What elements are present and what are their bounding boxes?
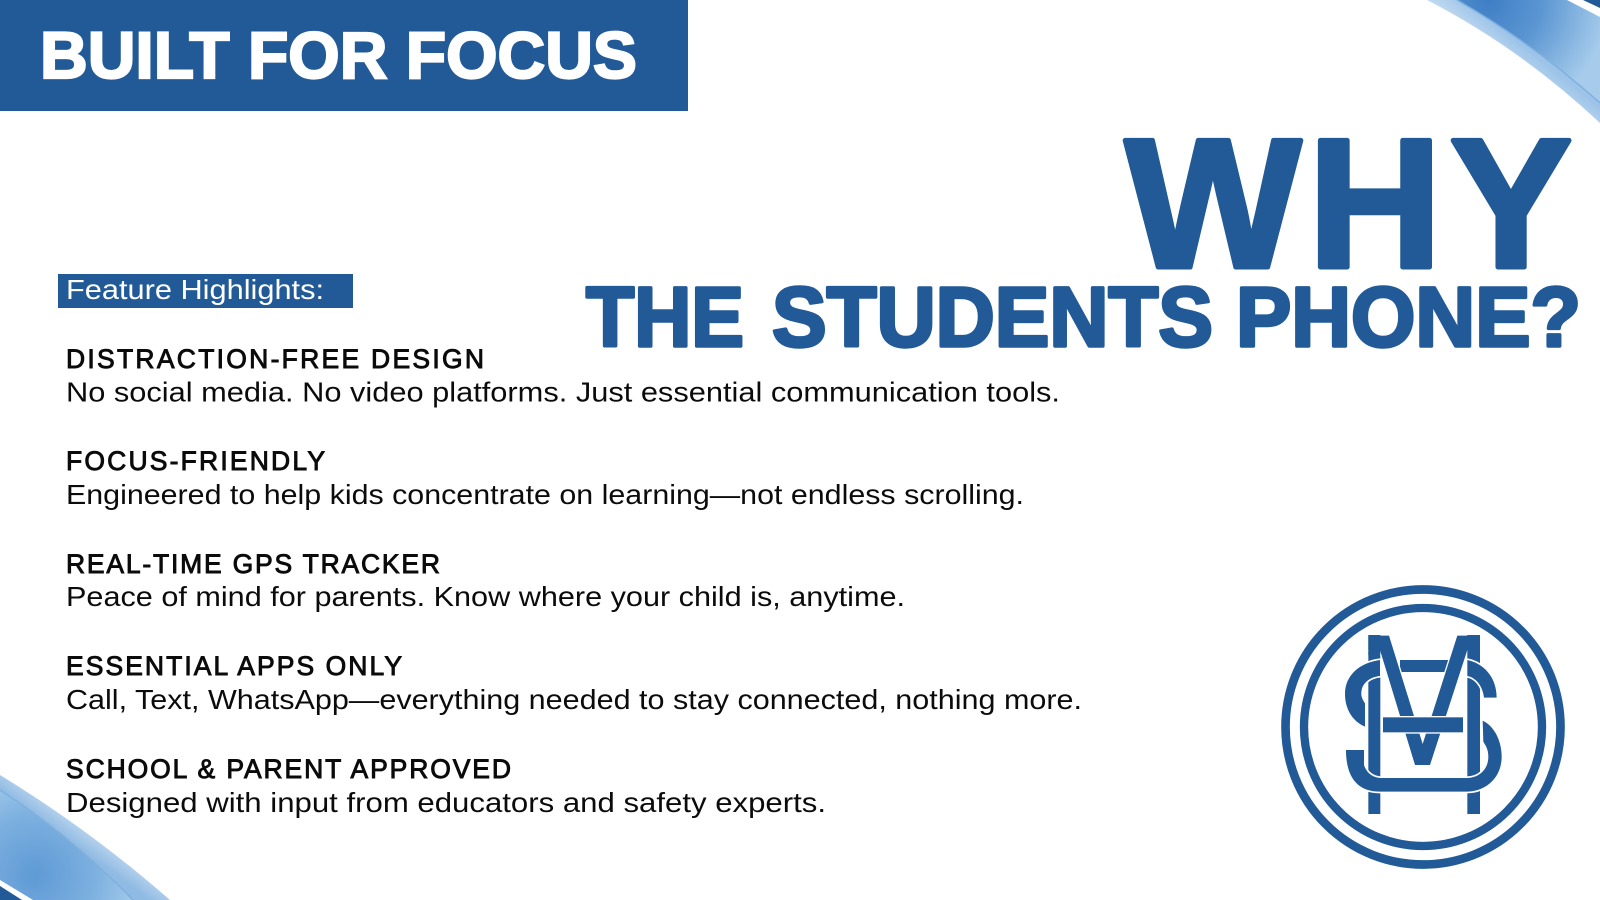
title banner: Built for Focus bbox=[0, 0, 688, 111]
feature: essential apps only: ESSENTIAL APPS ONLY bbox=[66, 651, 402, 681]
logo: MS monogram in double ring bbox=[1285, 589, 1560, 864]
heading: The Students Phone?: THE bbox=[586, 270, 744, 364]
feature: school and parent approved: Designed with input from educators and safety experts. bbox=[66, 787, 826, 818]
feature: distraction-free design bbox=[66, 344, 1060, 408]
heading: WHY: Y bbox=[1450, 100, 1572, 306]
decorative swoosh: bottom left corner bbox=[0, 775, 170, 900]
title banner: Built for Focus: BUILT FOR FOCUS bbox=[40, 18, 637, 92]
feature: real-time GPS tracker: REAL-TIME GPS TRACKER bbox=[66, 549, 440, 579]
label: Feature Highlights: Feature Highlights: bbox=[66, 274, 324, 305]
feature: distraction-free design: No social media. No video platforms. Just essential communication tools. bbox=[66, 376, 1060, 408]
feature: focus-friendly: FOCUS-FRIENDLY bbox=[66, 446, 325, 476]
feature: school and parent approved: SCHOOL & PARENT APPROVED bbox=[66, 754, 511, 784]
feature: real-time GPS tracker: Peace of mind for parents. Know where your child is, anytime. bbox=[66, 581, 905, 612]
feature: essential apps only: Call, Text, WhatsApp—everything needed to stay connected, nothing more. bbox=[66, 684, 1082, 715]
heading: The Students Phone?: STUDENTS bbox=[772, 270, 1213, 364]
heading: WHY bbox=[1125, 100, 1572, 306]
heading: WHY: H bbox=[1308, 100, 1442, 306]
feature: focus-friendly: Engineered to help kids concentrate on learning—not endless scrolling. bbox=[66, 479, 1024, 510]
feature: school and parent approved bbox=[66, 754, 826, 818]
feature: essential apps only bbox=[66, 651, 1082, 715]
heading: The Students Phone? bbox=[586, 270, 1581, 364]
heading: WHY: W bbox=[1125, 100, 1301, 306]
feature list bbox=[66, 344, 1082, 818]
feature: focus-friendly bbox=[66, 446, 1024, 510]
decorative swoosh: top right corner bbox=[1427, 0, 1600, 123]
feature: real-time GPS tracker bbox=[66, 549, 905, 612]
feature: distraction-free design: DISTRACTION-FREE DESIGN bbox=[66, 344, 484, 374]
heading: The Students Phone?: PHONE? bbox=[1236, 270, 1581, 364]
